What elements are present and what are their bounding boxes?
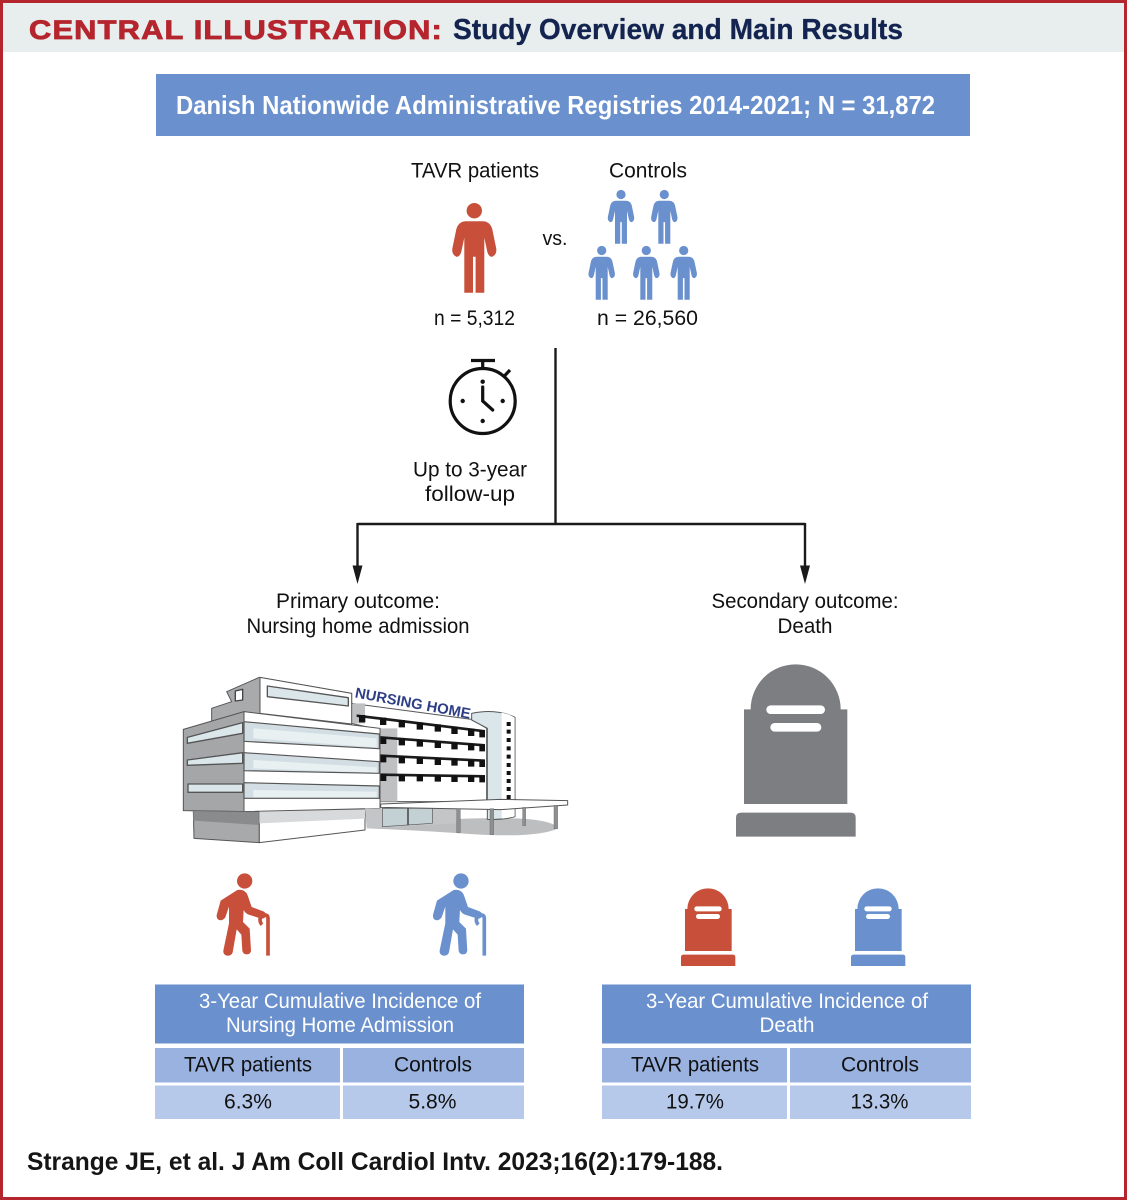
table: death — [602, 984, 971, 1119]
icon: control group figures — [588, 190, 697, 300]
icon: TAVR patient figure — [452, 203, 496, 293]
text: follow-up duration: follow-up — [425, 483, 515, 506]
banner: data source: Danish Nationwide Administrative Registries 2014-2021; N = 31,872 — [176, 90, 935, 120]
icon: TAVR elderly person with cane — [217, 873, 268, 956]
text: follow-up duration — [413, 458, 527, 506]
table: death: 3-Year Cumulative Incidence of — [646, 990, 928, 1013]
banner: data source — [156, 74, 970, 136]
table: nursing home admission — [155, 984, 524, 1119]
icon: control elderly person with cane — [433, 873, 484, 956]
label: TAVR count: n = 5,312 — [434, 307, 515, 330]
label: TAVR patients: TAVR patients — [411, 160, 539, 182]
text: primary outcome: Primary outcome: — [276, 590, 440, 613]
ground shadow — [367, 818, 558, 835]
main block dark side — [183, 712, 244, 812]
arrows: flow to outcomes — [352, 348, 810, 584]
lower level — [193, 811, 259, 843]
table: nursing home admission: 3-Year Cumulative Incidence of — [199, 990, 481, 1013]
table: nursing home admission: 6.3% — [224, 1090, 272, 1114]
text: primary outcome: Nursing home admission — [246, 615, 470, 638]
stair tower — [472, 712, 515, 819]
main block front — [244, 712, 380, 812]
label: control count: n = 26,560 — [597, 307, 698, 330]
icon: TAVR gravestone — [681, 888, 735, 966]
table: nursing home admission: Nursing Home Admission — [226, 1014, 454, 1037]
table: death: 19.7% — [666, 1090, 724, 1114]
header band — [3, 3, 1124, 52]
table: death: Controls — [841, 1054, 919, 1076]
text: primary outcome — [246, 590, 470, 638]
table: death: 13.3% — [850, 1090, 908, 1114]
icon: control gravestone — [851, 888, 905, 966]
text: secondary outcome — [712, 590, 898, 638]
label: vs: vs. — [542, 228, 568, 250]
text: secondary outcome: Death — [778, 615, 832, 638]
table: nursing home admission: 5.8% — [408, 1090, 456, 1114]
title: central illustration: CENTRAL ILLUSTRATION: — [29, 15, 443, 45]
table: death: TAVR patients — [631, 1054, 759, 1076]
illustration: nursing home building — [183, 677, 568, 843]
table: nursing home admission: TAVR patients — [184, 1054, 312, 1076]
citation: Strange JE, et al. J Am Coll Cardiol Intv. 2023;16(2):179-188. — [27, 1148, 723, 1176]
rear wing — [352, 703, 487, 802]
text: secondary outcome: Secondary outcome: — [712, 590, 898, 613]
icon: stopwatch — [450, 360, 515, 434]
label: Controls: Controls — [609, 160, 687, 182]
sign: NURSING HOME — [354, 686, 472, 723]
canopy — [381, 799, 568, 810]
top block — [212, 677, 352, 723]
icon: large gravestone — [736, 664, 856, 837]
table: nursing home admission: Controls — [394, 1054, 472, 1076]
title: study overview: Study Overview and Main Results — [453, 14, 903, 46]
text: follow-up duration: Up to 3-year — [413, 458, 527, 482]
table: death: Death — [760, 1014, 814, 1037]
window bands — [357, 714, 485, 778]
